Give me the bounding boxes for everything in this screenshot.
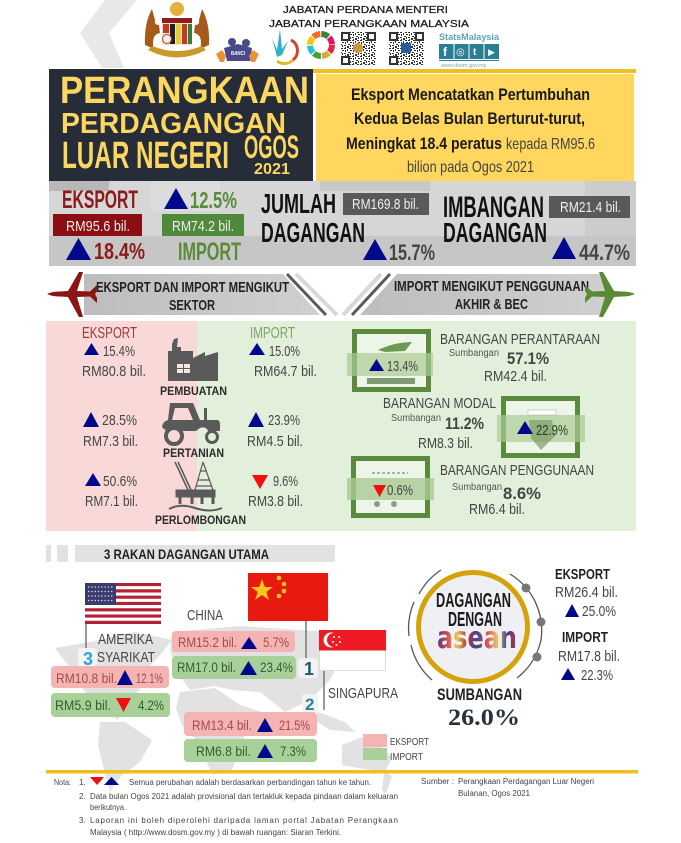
- intermediate text: Sumbangan: [449, 348, 499, 359]
- icon frame: consumption: [347, 458, 434, 516]
- intermediate text: [440, 331, 600, 385]
- notes: 2.: [79, 792, 86, 801]
- headline callout: Meningkat 18.4 peratus: [346, 134, 502, 153]
- heading arrow: sectors: SEKTOR: [169, 297, 215, 314]
- ASEAN share: SUMBANGAN: [437, 685, 522, 704]
- partner: United States: AMERIKA: [98, 631, 153, 648]
- StatsMalaysia social block: www.dosm.gov.my: [440, 63, 487, 69]
- rank 2: 2: [305, 695, 314, 714]
- consumption text: 8.6%: [503, 484, 541, 503]
- trade balance: RM21.4 bil.: [560, 199, 621, 216]
- USA import pill: [51, 693, 170, 717]
- partner: Singapore: SINGAPURA: [328, 685, 398, 702]
- headline callout: Kedua Belas Bulan Berturut-turut,: [354, 109, 585, 128]
- StatsMalaysia social block: ▶: [488, 47, 495, 57]
- intermediate goods: [347, 331, 600, 390]
- ASEAN share: 26.0%: [448, 705, 520, 730]
- import total: IMPORT: [178, 238, 241, 266]
- ASEAN export: RM26.4 bil.: [555, 584, 618, 601]
- partner: China: CHINA: [187, 607, 223, 624]
- USA export pill: [51, 666, 169, 688]
- world map: [55, 626, 392, 794]
- ASEAN import: IMPORT: [562, 629, 608, 646]
- agriculture export: [83, 412, 138, 450]
- ASEAN import: 22.3%: [581, 667, 613, 684]
- capital text: RM8.3 bil.: [418, 435, 473, 452]
- logo: hand: [272, 29, 297, 64]
- USA export pill: 12.1%: [136, 670, 163, 686]
- panel background: export: [46, 321, 197, 531]
- mining export: RM7.1 bil.: [85, 493, 138, 510]
- heading arrow: end use: IMPORT MENGIKUT PENGGUNAAN: [394, 278, 589, 295]
- export column heading: EKSPORT: [82, 325, 137, 342]
- legend: IMPORT: [390, 752, 423, 763]
- bottom yellow rule: [46, 770, 638, 774]
- rank 2: [302, 694, 318, 714]
- notes: 1.: [79, 778, 86, 787]
- headline callout: Eksport Mencatatkan Pertumbuhan: [351, 85, 590, 104]
- Singapore import pill: [184, 739, 317, 762]
- title panel: LUAR NEGERI: [62, 135, 229, 177]
- Singapore import pill: 7.3%: [280, 743, 306, 759]
- capital text: 11.2%: [445, 414, 484, 433]
- partner: China: [172, 607, 318, 679]
- department heading: JABATAN PERDANA MENTERI: [283, 4, 448, 16]
- capital goods: [383, 395, 585, 456]
- ASEAN share: [437, 685, 522, 730]
- total trade: [261, 188, 435, 265]
- agriculture import: [247, 412, 303, 450]
- manufacturing import: 15.0%: [269, 343, 300, 360]
- manufacturing export: [82, 343, 146, 380]
- icon: red plane: [47, 272, 97, 317]
- ASEAN badge: [409, 570, 546, 682]
- ASEAN badge: DENGAN: [448, 609, 502, 631]
- notes: Malaysia ( http://www.dosm.gov.my ) di bawah ruangan: Siaran Terkini.: [90, 828, 341, 837]
- manufacturing export: 15.4%: [103, 343, 135, 360]
- icon frame: intermediate: 13.4%: [387, 358, 418, 375]
- total trade: JUMLAH: [261, 188, 336, 219]
- source: [421, 777, 594, 798]
- capital text: Sumbangan: [391, 413, 441, 424]
- Singapore export pill: 21.5%: [279, 717, 310, 733]
- intermediate text: BARANGAN PERANTARAAN: [440, 331, 600, 348]
- source: Sumber :: [421, 777, 454, 786]
- title panel: PERDAGANGAN: [61, 108, 286, 140]
- capital text: BARANGAN MODAL: [383, 395, 496, 412]
- ASEAN export: EKSPORT: [555, 566, 610, 583]
- top yellow rule: [313, 69, 636, 73]
- intermediate text: 57.1%: [507, 349, 549, 368]
- department heading: JABATAN PERANGKAAN MALAYSIA: [269, 18, 469, 30]
- rank 1: [298, 658, 318, 679]
- notes: berikutnya.: [90, 803, 126, 812]
- partner: United States: SYARIKAT: [97, 649, 155, 666]
- total trade: DAGANGAN: [261, 217, 365, 248]
- notes: Semua perubahan adalah berdasarkan perbandingan tahun ke tahun.: [129, 778, 371, 787]
- China flag: [248, 573, 328, 658]
- source: Bulanan, Ogos 2021: [458, 789, 531, 798]
- ASEAN import: RM17.8 bil.: [558, 648, 620, 665]
- mining import: 9.6%: [273, 473, 298, 490]
- China import pill: 23.4%: [260, 659, 293, 675]
- title panel: [49, 69, 313, 181]
- ASEAN badge: DAGANGAN: [436, 590, 511, 612]
- agriculture export: RM7.3 bil.: [83, 433, 138, 450]
- StatsMalaysia social block: StatsMalaysia: [439, 32, 500, 43]
- icon: oil rig: [169, 462, 222, 510]
- Singapore export pill: [184, 712, 317, 736]
- mining export: 50.6%: [103, 473, 137, 490]
- label: manufacturing: PEMBUATAN: [160, 384, 227, 398]
- agriculture export: 28.5%: [102, 412, 137, 429]
- summary band: [49, 181, 636, 266]
- consumption goods: [347, 458, 594, 518]
- ASEAN export: 25.0%: [582, 603, 616, 620]
- QR code 2: [389, 32, 424, 65]
- China import pill: [172, 656, 296, 679]
- export and import by sector: [82, 325, 317, 527]
- import total: RM74.2 bil.: [172, 218, 234, 235]
- StatsMalaysia social block: [439, 32, 500, 69]
- USA import pill: 4.2%: [138, 697, 164, 713]
- Singapore import pill: RM6.8 bil.: [196, 743, 251, 759]
- icon: green plane: [585, 272, 635, 317]
- headline callout: [316, 74, 634, 181]
- China export pill: [172, 631, 295, 652]
- icon frame: capital: [497, 398, 585, 456]
- title panel: 2021: [254, 161, 290, 178]
- trade balance: IMBANGAN: [443, 191, 544, 224]
- ASEAN badge: asean: [437, 621, 517, 656]
- headline callout: kepada RM95.6: [506, 136, 595, 153]
- Singapore export pill: RM13.4 bil.: [192, 717, 252, 733]
- export total: [53, 186, 145, 264]
- notes: 3.: [79, 816, 86, 825]
- StatsMalaysia social block: f: [443, 45, 448, 59]
- rank 3: 3: [83, 649, 93, 669]
- StatsMalaysia social block: t: [473, 47, 477, 58]
- notes: Laporan ini boleh diperolehi daripada laman portal Jabatan Perangkaan: [90, 816, 398, 825]
- heading: top three trading partners: 3 RAKAN DAGANGAN UTAMA: [104, 546, 269, 562]
- manufacturing export: RM80.8 bil.: [82, 363, 146, 380]
- notes: Data bulan Ogos 2021 adalah provisional dan tertakluk kepada pindaan dalam keluaran: [90, 792, 398, 801]
- China export pill: 5.7%: [263, 634, 289, 650]
- icon: tractor: [162, 403, 220, 444]
- trade balance: DAGANGAN: [443, 217, 547, 248]
- USA export pill: RM10.8 bil.: [56, 670, 117, 686]
- Singapore flag: [319, 630, 386, 710]
- manufacturing import: [249, 343, 317, 380]
- QR code 1: [341, 32, 376, 65]
- notes: [54, 777, 398, 837]
- heading arrow: sectors: [84, 274, 337, 315]
- rank 1: 1: [304, 659, 314, 679]
- manufacturing import: RM64.7 bil.: [254, 363, 317, 380]
- label: agriculture: PERTANIAN: [163, 446, 224, 460]
- China export pill: RM15.2 bil.: [178, 634, 237, 650]
- icon frame: consumption: 0.6%: [387, 482, 413, 499]
- label: mining: PERLOMBONGAN: [155, 513, 246, 527]
- icon: factory: [168, 338, 218, 381]
- notes: Nota:: [54, 778, 71, 787]
- export total: EKSPORT: [62, 186, 138, 214]
- trade balance: [443, 191, 630, 265]
- import total: [162, 187, 244, 266]
- mining import: RM3.8 bil.: [248, 493, 303, 510]
- partner: Singapore: [184, 685, 398, 762]
- logo: census: [216, 38, 259, 62]
- heading: top three trading partners: [46, 545, 335, 562]
- icon frame: intermediate: [347, 332, 433, 390]
- consumption text: Sumbangan: [452, 482, 502, 493]
- StatsMalaysia social block: ◎: [456, 47, 465, 58]
- China import pill: RM17.0 bil.: [177, 659, 236, 675]
- title panel: PERANGKAAN: [60, 70, 309, 112]
- logo: SDG ring: [310, 34, 332, 56]
- total trade: RM169.8 bil.: [352, 196, 419, 213]
- consumption text: RM6.4 bil.: [469, 501, 525, 518]
- export total: RM95.6 bil.: [66, 218, 130, 235]
- heading arrow: sectors: EKSPORT DAN IMPORT MENGIKUT: [96, 279, 289, 296]
- ASEAN import: [558, 629, 620, 684]
- consumption text: BARANGAN PENGGUNAAN: [440, 462, 594, 479]
- total trade: 15.7%: [389, 240, 435, 265]
- panel background: import: [197, 321, 636, 531]
- headline callout: bilion pada Ogos 2021: [407, 159, 534, 176]
- intermediate text: RM42.4 bil.: [484, 368, 547, 385]
- USA import pill: RM5.9 bil.: [55, 697, 111, 713]
- import total: 12.5%: [190, 187, 237, 213]
- export total: 18.4%: [94, 238, 145, 264]
- capital text: [383, 395, 496, 452]
- ASEAN export: [555, 566, 618, 620]
- heading arrow: end use: [343, 274, 613, 315]
- consumption text: [440, 462, 594, 518]
- heading arrow: end use: AKHIR & BEC: [455, 296, 528, 313]
- icon frame: capital: 22.9%: [536, 422, 568, 439]
- government crest: [145, 2, 209, 58]
- logo: census: BANCI: [231, 51, 246, 57]
- source: Perangkaan Perdagangan Luar Negeri: [458, 777, 594, 786]
- USA flag: [85, 583, 161, 648]
- trade balance: 44.7%: [579, 240, 630, 265]
- decorative chevron: [80, 0, 137, 68]
- legend: [363, 734, 429, 763]
- agriculture import: 23.9%: [268, 412, 300, 429]
- legend: EKSPORT: [390, 737, 429, 748]
- title panel: OGOS: [244, 129, 299, 165]
- import column heading: IMPORT: [250, 325, 295, 342]
- mining import: [248, 473, 303, 510]
- department heading: [269, 4, 469, 30]
- mining export: [85, 473, 138, 510]
- agriculture import: RM4.5 bil.: [247, 433, 303, 450]
- partner: United States: [51, 631, 170, 717]
